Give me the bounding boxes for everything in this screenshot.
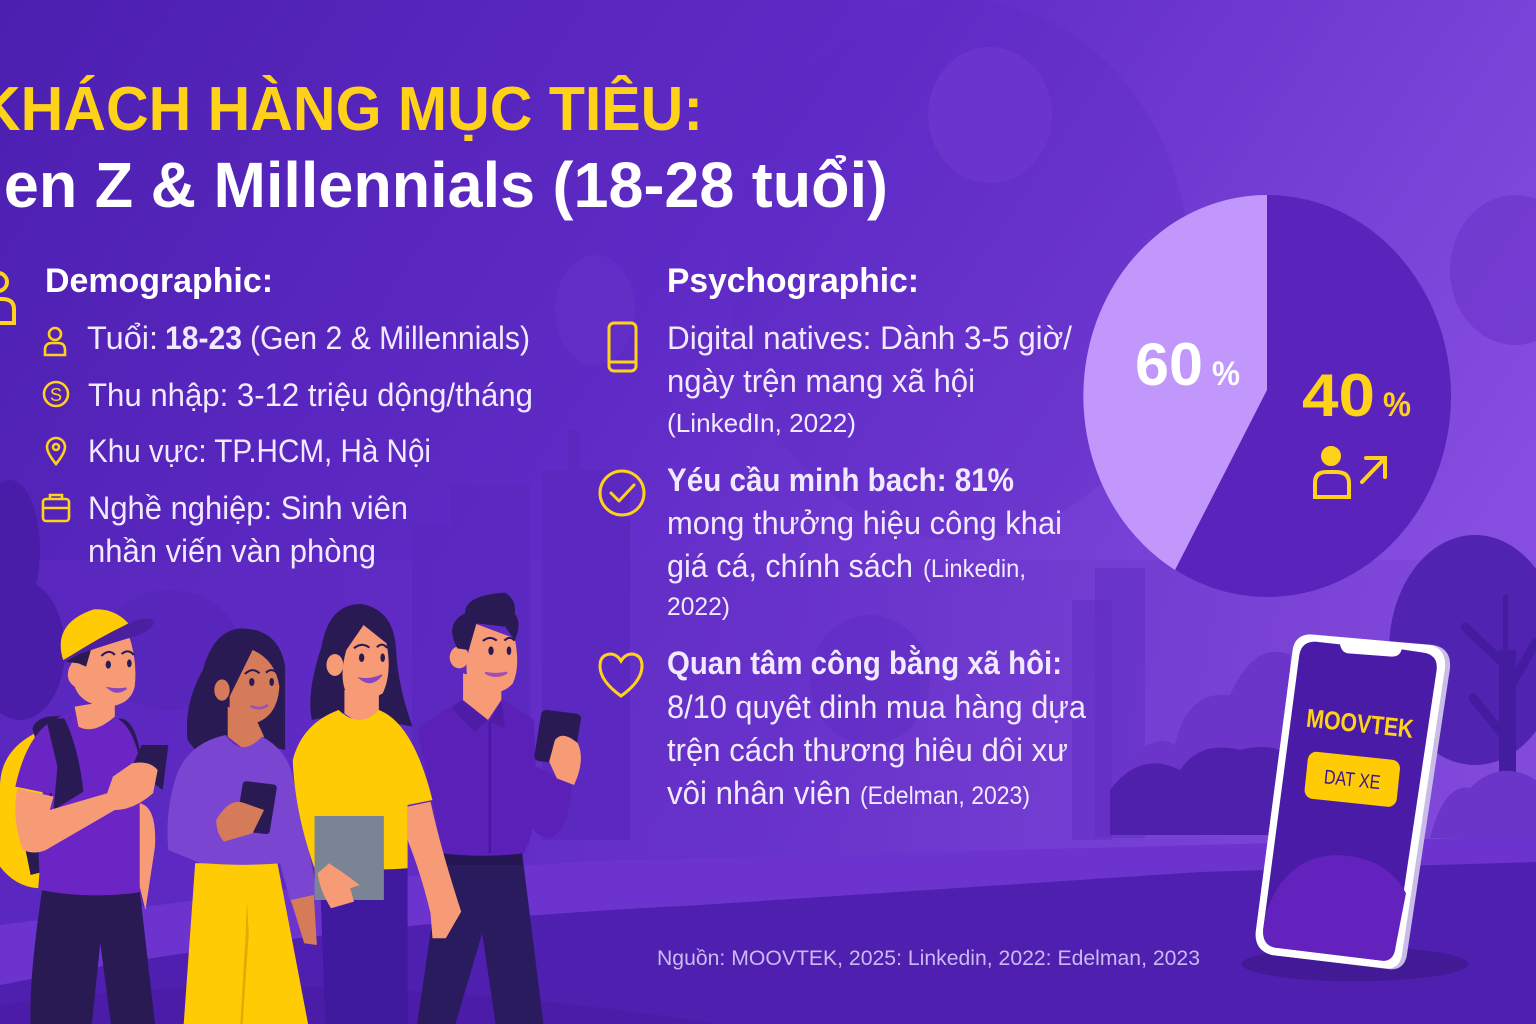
person 3: yellow shirt bbox=[276, 604, 461, 1024]
label: 60%: % bbox=[1212, 355, 1240, 393]
button: dat xe bbox=[1304, 751, 1401, 808]
icon: map pin bbox=[47, 438, 65, 464]
transparency text: giá cá, chính sách bbox=[667, 548, 913, 584]
age row: Tuổi: bbox=[87, 320, 158, 356]
icon: briefcase bbox=[43, 495, 69, 521]
pie chart bbox=[1083, 195, 1451, 597]
transparency text: mong thưởng hiệu công khai bbox=[667, 505, 1062, 541]
icon: demographic person bbox=[0, 273, 14, 323]
transparency text bbox=[667, 462, 1062, 621]
occupation row bbox=[88, 490, 408, 569]
social fairness text: (Edelman, 2023) bbox=[860, 782, 1030, 810]
transparency text: 2022) bbox=[667, 593, 730, 621]
phone mockup bbox=[1242, 634, 1468, 981]
title bbox=[0, 75, 888, 221]
people illustration bbox=[0, 593, 582, 1024]
social fairness text: Quan tâm công bằng xã hôi: bbox=[667, 645, 1062, 681]
trees and bushes bbox=[0, 480, 1536, 840]
brand name: MOOVTEK bbox=[1305, 703, 1415, 744]
heading: psychographic: Psychographic: bbox=[667, 262, 919, 300]
phone shadow bbox=[1242, 947, 1468, 981]
social fairness text: vôi nhân viên bbox=[667, 775, 851, 811]
phone screen bbox=[1263, 642, 1437, 961]
slice: 40% bbox=[1084, 195, 1451, 597]
slice: 60% bbox=[1083, 195, 1267, 570]
transparency text: Yéu cầu minh bach: 81% bbox=[667, 462, 1014, 498]
age row bbox=[87, 320, 530, 356]
source note: Nguồn: MOOVTEK, 2025: Linkedin, 2022: Edelman, 2023 bbox=[657, 947, 1200, 970]
occupation row: Nghề nghiệp: Sinh viên bbox=[88, 490, 408, 526]
icon: coin: S bbox=[50, 385, 62, 405]
icon: person bbox=[45, 328, 65, 355]
person 1: cap and backpack bbox=[0, 609, 168, 1024]
social fairness text: trện cách thương hiêu dôi xư bbox=[667, 732, 1068, 768]
heading: demographic: Demographic: bbox=[45, 262, 273, 300]
digital natives text: Digital natives: Dành 3-5 giờ/ bbox=[667, 320, 1072, 356]
ground bbox=[0, 836, 1536, 1024]
transparency text: (Linkedin, bbox=[923, 555, 1026, 583]
social fairness text: 8/10 quyêt dinh mua hàng dựa bbox=[667, 689, 1086, 725]
label: 60% bbox=[1135, 331, 1240, 398]
icon: coin bbox=[44, 382, 68, 406]
age row: 18-23 bbox=[165, 320, 242, 356]
age row: (Gen 2 & Millennials) bbox=[250, 320, 530, 356]
icon: person with up arrow bbox=[1315, 448, 1385, 497]
label: 60%: 60 bbox=[1135, 331, 1203, 398]
panel: psychographic bbox=[600, 262, 1086, 811]
income row: Thu nhập: 3-12 triệu dộng/tháng bbox=[88, 377, 533, 413]
label: 40%: % bbox=[1383, 386, 1411, 424]
panel: demographic bbox=[0, 262, 533, 569]
icon: check circle bbox=[600, 471, 644, 515]
icon: heart bbox=[600, 654, 642, 696]
title line 1: KHÁCH HÀNG MỤC TIÊU: bbox=[0, 75, 703, 144]
person 4: purple shirt bbox=[417, 593, 582, 1024]
screen hill bbox=[1263, 855, 1406, 961]
button: dat xe: DAT XE bbox=[1323, 766, 1382, 794]
city skyline bbox=[412, 430, 1145, 845]
phone body bbox=[1256, 634, 1450, 969]
digital natives text bbox=[667, 320, 1072, 438]
digital natives text: (LinkedIn, 2022) bbox=[667, 408, 856, 438]
occupation row: nhần viến vàn phòng bbox=[88, 533, 376, 569]
icon: phone bbox=[609, 323, 636, 371]
person 2: purple sweater bbox=[167, 628, 308, 1024]
digital natives text: ngày trện mang xã hội bbox=[667, 363, 975, 399]
social fairness text bbox=[667, 645, 1086, 811]
label: 40% bbox=[1302, 362, 1411, 429]
label: 40%: 40 bbox=[1302, 362, 1375, 429]
region row: Khu vực: TP.HCM, Hà Nội bbox=[88, 433, 431, 469]
